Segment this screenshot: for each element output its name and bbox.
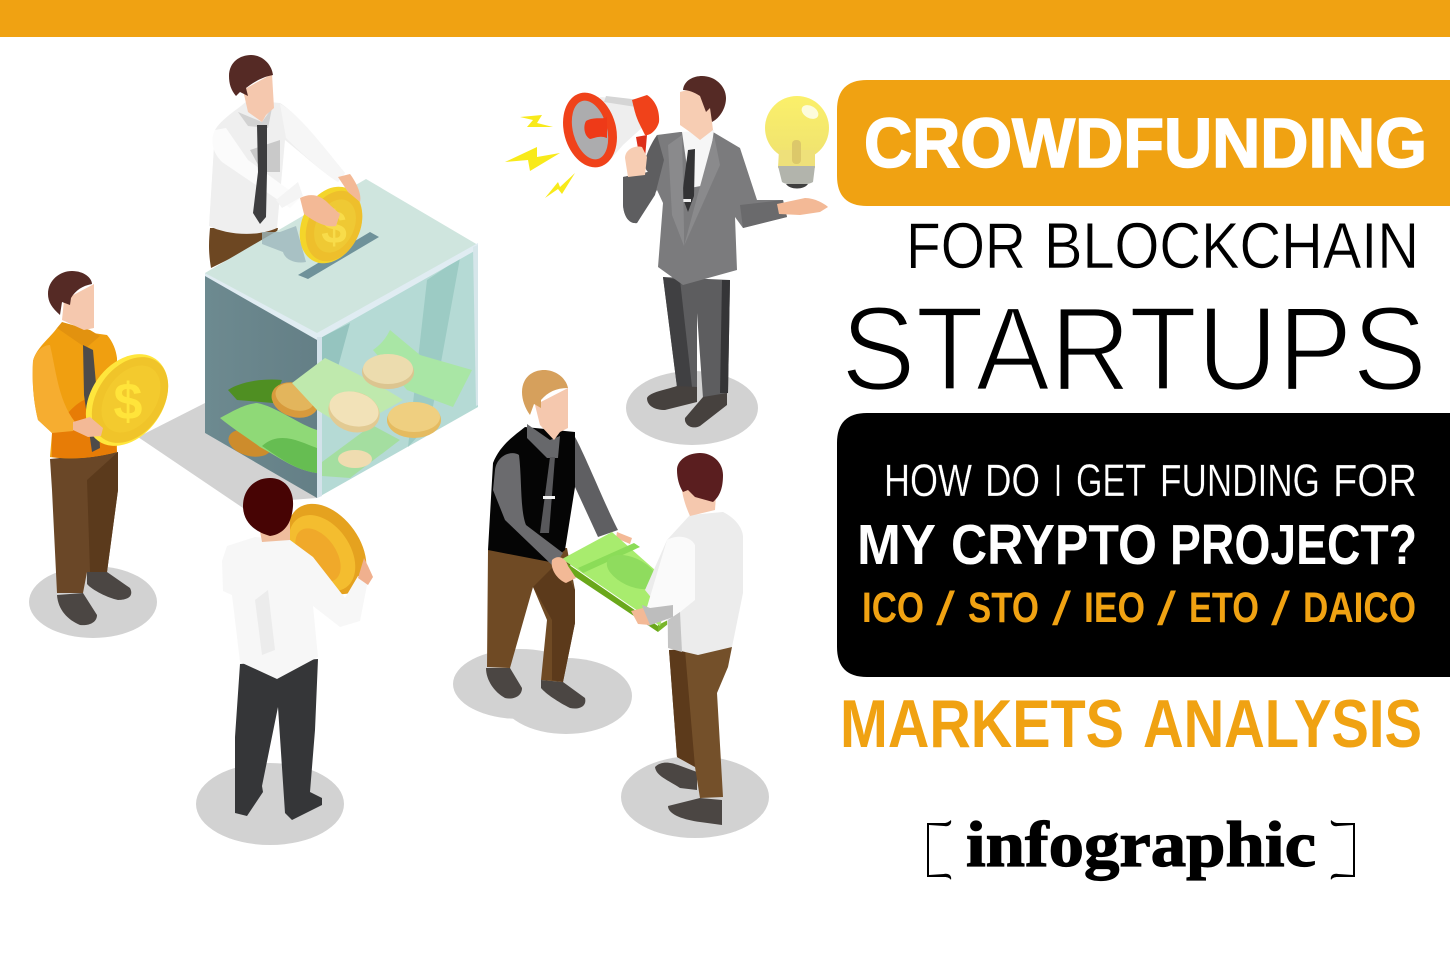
money inside box (220, 330, 472, 478)
funding types: / (1052, 582, 1072, 635)
label: infographic: infographic (966, 809, 1316, 881)
illustration: shadow ellipses (29, 371, 769, 845)
illustration: stack of banknotes (552, 532, 672, 632)
illustration: person dropping coin (209, 55, 345, 268)
question line: GET (1076, 455, 1146, 506)
funding types: DAICO (1303, 584, 1416, 632)
illustration: person with blond hair handing money (486, 370, 632, 709)
funding types: STO (968, 584, 1039, 632)
question emphasis: MY (857, 513, 936, 577)
top orange bar (0, 0, 1450, 37)
funding types: / (1157, 582, 1177, 635)
question line: FUNDING (1160, 455, 1320, 506)
funding types: ETO (1189, 584, 1259, 632)
icon: megaphone (555, 87, 659, 177)
illustration: cast shadow of box (138, 403, 317, 510)
funding types (862, 582, 1416, 635)
icon: light bulb (765, 96, 829, 188)
illustration: speaker with megaphone (623, 76, 828, 427)
heading: markets analysis: MARKETS (840, 686, 1124, 762)
funding types: / (1271, 582, 1291, 635)
question line: DO (985, 455, 1040, 506)
illustration: person with coin on the left (33, 271, 185, 625)
illustration: person with coin on the left: $ (114, 373, 143, 431)
funding types: / (936, 582, 956, 635)
illustration: person from behind with coin on shoulder (222, 478, 383, 820)
question line (884, 455, 1417, 506)
heading: for blockchain (906, 209, 1419, 282)
question emphasis (857, 513, 1417, 577)
funding types: ICO (862, 584, 924, 632)
icon: lightning sparks (505, 115, 575, 198)
funding types: IEO (1084, 584, 1145, 632)
heading: markets analysis (840, 686, 1422, 762)
illustration: person from behind receiving money (631, 453, 743, 825)
heading: for blockchain: FOR (906, 209, 1026, 282)
illustration: transparent donation box (205, 179, 478, 498)
banner: crowdfunding (837, 80, 1450, 206)
question line: HOW (884, 455, 972, 506)
question line: FOR (1333, 455, 1417, 506)
panel: funding question (837, 413, 1450, 677)
banner: crowdfunding: CROWDFUNDING (864, 104, 1427, 182)
illustration: coin over the slot (288, 174, 374, 274)
question emphasis: CRYPTO (951, 513, 1157, 577)
illustration: coin over the slot: $ (321, 201, 347, 253)
question line: I (1054, 455, 1062, 506)
